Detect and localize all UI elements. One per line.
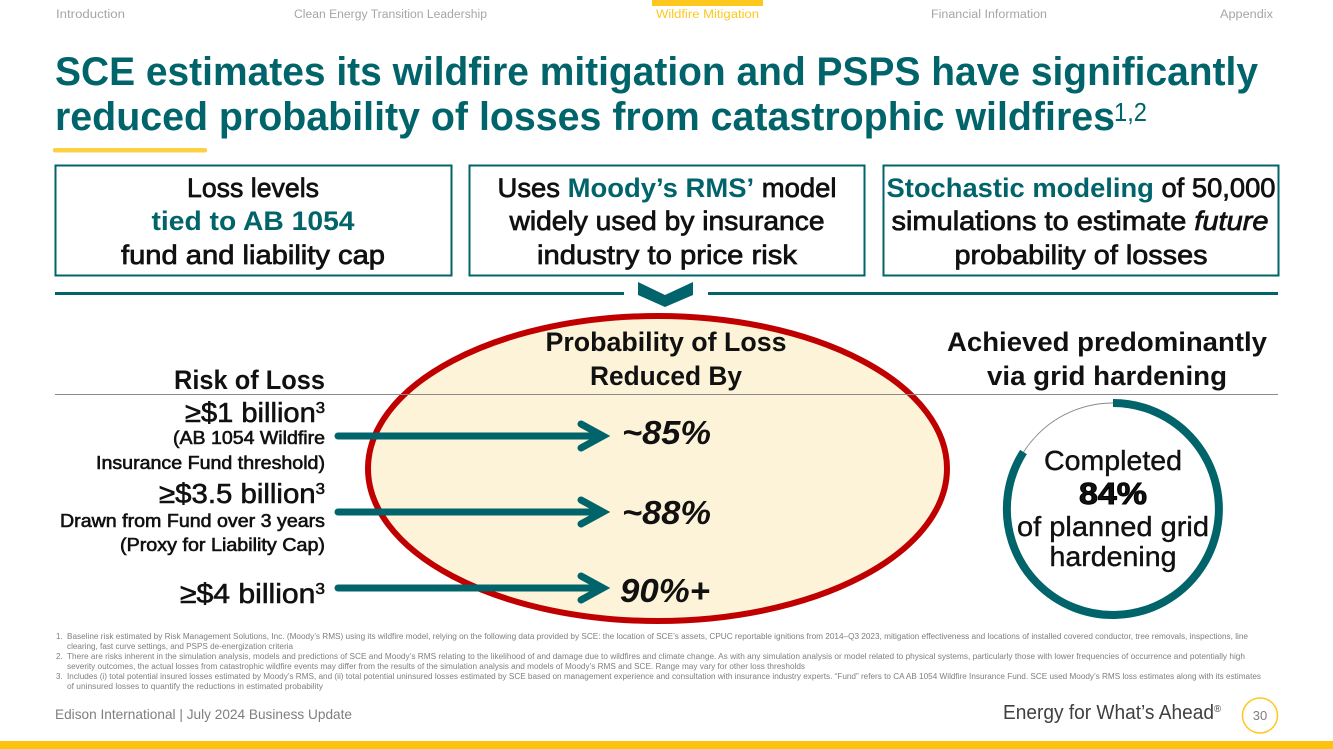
risk label: 1 billion: 3 (316, 400, 325, 417)
heading: probability of loss reduced by (546, 327, 786, 391)
value: 85 percent: ~85% (622, 414, 711, 451)
heading: probability of loss reduced by: Reduced By (590, 361, 742, 391)
risk label: 1 billion: Insurance Fund threshold) (96, 453, 325, 473)
panel: stochastic modeling: Stochastic modeling of 50,000 (886, 173, 1276, 203)
risk label: 3.5 billion: 3 (316, 481, 325, 498)
risk label: 1 billion: (AB 1054 Wildfire (173, 428, 325, 448)
progress ring: 84 percent (1007, 403, 1219, 615)
heading: achieved via grid hardening: via grid hardening (987, 361, 1227, 391)
value: 90 percent plus: 90%+ (620, 572, 710, 609)
footnotes: Includes (i) total potential insured losses estimated by Moody’s RMS, and (ii) total potential uninsured losses estimated by SCE based on management experience and consultation with insurance industry experts. “Fund” refers to CA AB 1054 Wildfire Insurance Fund. SCE used Moody’s RMS loss estimates along with its estimates (67, 672, 1261, 681)
panel: Moody's RMS model: Uses Moody’s RMS’ model (498, 173, 836, 203)
panel: loss levels (56, 166, 452, 276)
title (55, 50, 1259, 139)
risk label: 3.5 billion: (Proxy for Liability Cap) (120, 535, 325, 555)
risk label: 3.5 billion (60, 478, 325, 555)
panel: stochastic modeling (884, 166, 1278, 276)
ring text: 84% (1079, 476, 1147, 511)
footnotes: 1. (56, 632, 63, 641)
heading: achieved via grid hardening: Achieved predominantly (947, 327, 1267, 357)
ring text: hardening (1050, 541, 1176, 572)
title: 1,2 (1114, 97, 1147, 127)
arrow: 1 billion (338, 424, 603, 448)
footnotes (56, 632, 1261, 691)
page number (1242, 698, 1278, 733)
risk label: 3.5 billion: ≥$3.5 billion (159, 478, 308, 509)
footer tagline: Energy for What’s Ahead (1003, 702, 1224, 724)
ring text: Completed (1044, 445, 1182, 476)
navigation bar (56, 0, 1273, 21)
bottom bar (0, 741, 1333, 749)
arrow: 3.5 billion (338, 500, 603, 524)
navigation bar: Clean Energy Transition Leadership (294, 9, 487, 21)
navigation bar: Appendix (1220, 9, 1273, 21)
risk label: 1 billion (96, 397, 325, 473)
ring text: of planned grid (1017, 511, 1209, 542)
page number: 30 (1253, 708, 1267, 723)
title underline accent (53, 148, 207, 152)
panel: loss levels: Loss levels (187, 173, 319, 203)
footnotes: of uninsured losses to quantify the reductions in estimated probability (67, 682, 323, 691)
panel: stochastic modeling: probability of losses (954, 240, 1208, 270)
navigation bar: Introduction (56, 9, 125, 21)
footnotes: severity outcomes, the actual losses from catastrophic wildfire events may differ from the results of the simulation analysis and models of Moody’s RMS and SCE. Range may vary for other loss thresholds (67, 662, 805, 671)
title: SCE estimates its wildfire mitigation and PSPS have significantly (55, 50, 1259, 94)
title: reduced probability of losses from catastrophic wildfires (55, 95, 1115, 139)
heading: risk of loss: Risk of Loss (174, 365, 325, 395)
footer tagline: ® (1214, 704, 1222, 715)
arrow: 4 billion (338, 576, 603, 600)
value: 88 percent: ~88% (622, 494, 711, 531)
ring text (1017, 445, 1209, 572)
risk label: 1 billion: ≥$1 billion (185, 397, 311, 428)
divider with chevron arrow (55, 282, 1278, 307)
panel: loss levels: fund and liability cap (121, 240, 385, 270)
panel: Moody's RMS model: industry to price risk (537, 240, 798, 270)
risk label: 4 billion: ≥$4 billion (180, 578, 306, 609)
panel: Moody's RMS model: widely used by insurance (508, 206, 824, 236)
panel: Moody's RMS model (470, 166, 864, 276)
heading: probability of loss reduced by: Probability of Loss (546, 327, 786, 357)
heading: achieved via grid hardening (947, 327, 1267, 391)
footnotes: clearing, fast curve settings, and PSPS de-energization criteria (67, 642, 294, 651)
navigation bar: Wildfire Mitigation (656, 9, 759, 21)
panel: loss levels: tied to AB 1054 (152, 206, 354, 236)
footnotes: 2. (56, 652, 63, 661)
probability ellipse (368, 316, 947, 621)
footnotes: 3. (56, 672, 63, 681)
panel: stochastic modeling: simulations to estimate future (892, 206, 1268, 236)
risk label: 4 billion: 3 (315, 581, 325, 598)
risk label: 3.5 billion: Drawn from Fund over 3 years (60, 511, 325, 531)
header rule (55, 394, 1278, 395)
footnotes: There are risks inherent in the simulation analysis, models and predictions of SCE and Moody’s RMS relating to the likelihood of and damage due to wildfires and climate change. As with any simulation analysis or model related to physical systems, particularly those with lower frequencies of occurrence and potentially high (67, 652, 1245, 661)
navigation bar: Financial Information (931, 9, 1047, 21)
footnotes: Baseline risk estimated by Risk Management Solutions, Inc. (Moody’s RMS) using its wildfire model, relying on the following data provided by SCE: the location of SCE’s assets, CPUC reportable ignitions from 2014–Q3 2023, mitigation effectiveness and locations of installed covered conductor, tree removals, inspections, line (67, 632, 1249, 641)
footer left: Edison International | July 2024 Business Update (55, 706, 352, 722)
